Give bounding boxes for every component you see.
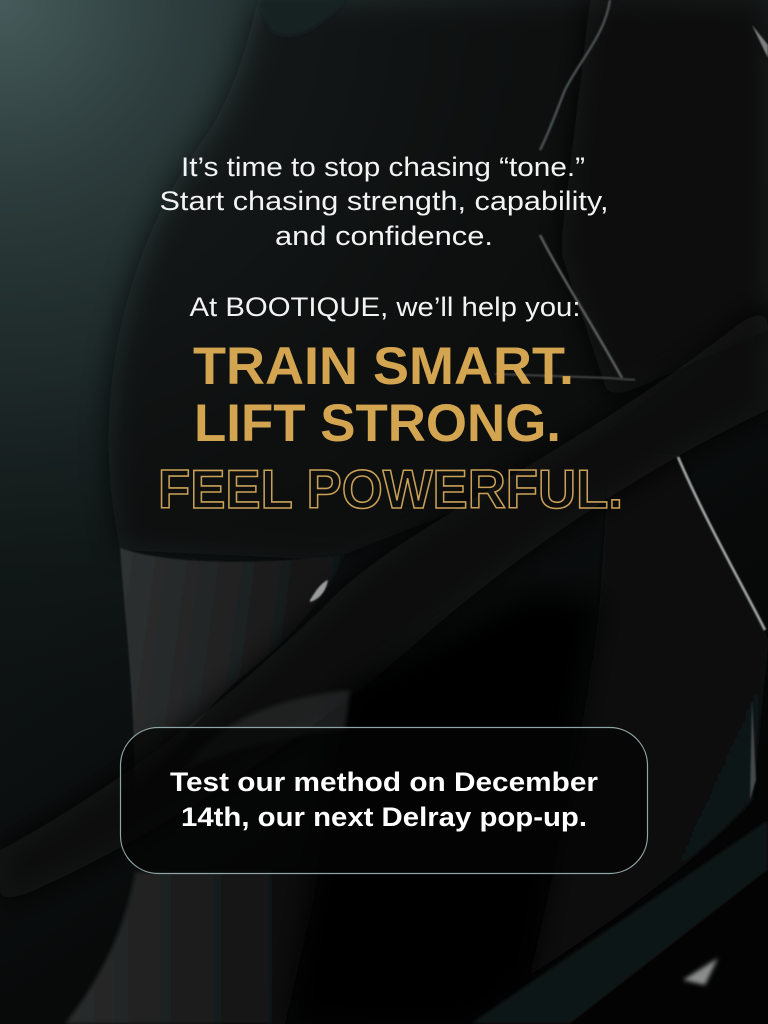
subheading: At BOOTIQUE, we’ll help you:: [190, 292, 580, 322]
intro text: It’s time to stop chasing “tone.”: [181, 152, 585, 182]
left leg upper: [120, 548, 345, 800]
bottom right strap: [470, 820, 768, 1024]
upper right dark shape: [560, 0, 768, 400]
headline: train smart: TRAIN SMART.: [193, 337, 574, 396]
right lower panel: [530, 450, 768, 975]
dark clothing shape: [109, 0, 768, 560]
black strap diagonal: [0, 300, 768, 905]
dark centre: [290, 590, 600, 1024]
intro text: Start chasing strength, capability,: [160, 186, 608, 216]
headline: feel powerful outlined: FEEL POWERFUL.: [158, 458, 623, 520]
top fold: [258, 0, 345, 36]
callout box: [120, 728, 648, 874]
callout text: Test our method on December: [170, 767, 599, 797]
left leg lower: [65, 872, 320, 1024]
callout text: 14th, our next Delray pop-up.: [181, 802, 587, 832]
highlights: [678, 457, 765, 630]
headline: lift strong: LIFT STRONG.: [194, 394, 561, 453]
intro text: [160, 152, 608, 251]
intro text: and confidence.: [275, 221, 493, 251]
callout text: [170, 767, 599, 832]
